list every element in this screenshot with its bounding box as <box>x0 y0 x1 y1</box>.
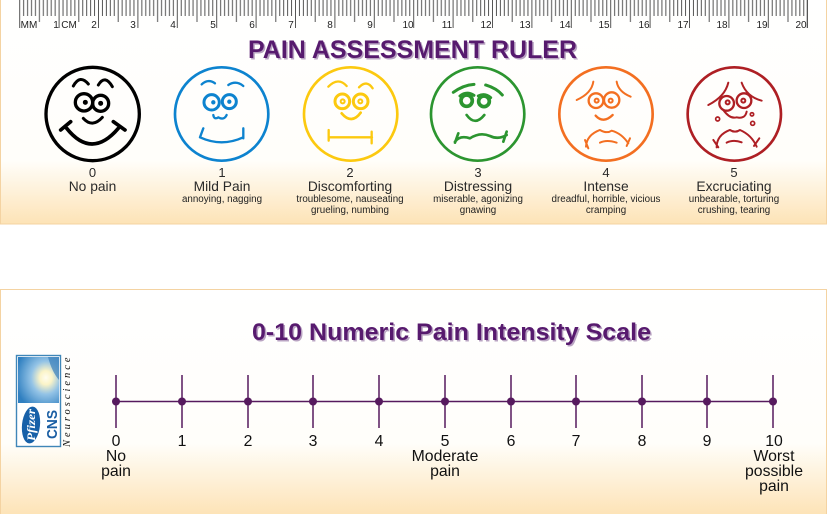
axis numbers: 2 <box>244 433 252 450</box>
ruler scale: 10 <box>402 20 414 31</box>
label: 3 distressing <box>433 165 523 216</box>
face 2: discomforting <box>304 67 397 161</box>
face 4: intense <box>559 67 653 161</box>
axis numbers: 5 <box>441 433 450 450</box>
ruler scale: 7 <box>288 20 294 31</box>
anchor label: moderate pain: Moderate <box>412 448 479 465</box>
logo: pfizer cns neuroscience <box>16 355 73 448</box>
ruler scale: 18 <box>716 20 728 31</box>
label: 4 intense: dreadful, horrible, vicious <box>552 194 661 205</box>
number line 0 to 10 <box>112 375 777 428</box>
ruler scale: 4 <box>170 20 176 31</box>
ruler scale: 8 <box>327 20 333 31</box>
label: 0 no pain <box>69 165 116 194</box>
axis numbers: 7 <box>572 433 580 450</box>
anchor label: no pain: pain <box>101 463 131 480</box>
ruler scale <box>19 0 808 31</box>
label: 0 no pain: 0 <box>89 165 96 180</box>
anchor label: worst possible pain <box>745 448 803 495</box>
label: 3 distressing: Distressing <box>444 179 512 194</box>
label: 1 mild pain: 1 <box>218 165 226 180</box>
panel: numeric pain intensity scale <box>0 290 826 514</box>
panel: pain assessment ruler <box>0 0 826 224</box>
label: 5 excruciating: unbearable, torturing <box>689 194 779 205</box>
anchor label: no pain: No <box>106 448 126 465</box>
logo: pfizer cns neuroscience: CNS <box>44 410 61 439</box>
axis numbers <box>112 433 783 450</box>
label: 1 mild pain <box>182 165 262 205</box>
label: 2 discomforting: Discomforting <box>308 179 392 194</box>
ruler scale: 12 <box>480 20 492 31</box>
ruler scale: 20 <box>795 20 807 31</box>
ruler scale: 1 <box>53 20 59 31</box>
ruler scale: 14 <box>559 20 571 31</box>
label: 2 discomforting: troublesome, nauseating <box>296 194 404 205</box>
axis numbers: 1 <box>178 433 187 450</box>
label: 5 excruciating <box>689 165 779 216</box>
axis numbers: 3 <box>309 433 318 450</box>
axis numbers: 8 <box>638 433 647 450</box>
axis numbers: 6 <box>507 433 516 450</box>
ruler scale: 11 <box>442 20 453 31</box>
anchor label: worst possible pain: possible <box>745 463 803 480</box>
ruler scale: 15 <box>598 20 610 31</box>
label: 4 intense: cramping <box>586 205 626 216</box>
ruler scale: 3 <box>130 20 136 31</box>
anchor label: moderate pain <box>412 448 479 480</box>
label: 1 mild pain: annoying, nagging <box>182 194 262 205</box>
label: 0 no pain: No pain <box>69 179 116 194</box>
ruler scale: 19 <box>756 20 768 31</box>
label: 4 intense <box>552 165 661 216</box>
axis numbers: 9 <box>703 433 712 450</box>
anchor label: worst possible pain: Worst <box>754 448 795 465</box>
ruler scale: 6 <box>249 20 255 31</box>
ruler scale: 17 <box>677 20 689 31</box>
label: 5 excruciating: crushing, tearing <box>698 205 770 216</box>
title: numeric pain intensity scale: 0-10 Numeric Pain Intensity Scale <box>252 319 651 346</box>
face 5: excruciating <box>688 67 781 161</box>
label: 5 excruciating: 5 <box>730 165 738 180</box>
face 1: mild pain <box>175 67 268 161</box>
title: pain assessment ruler: PAIN ASSESSMENT RULER <box>248 36 577 64</box>
label: 3 distressing: miserable, agonizing <box>433 194 523 205</box>
title: numeric pain intensity scale: 0-10 Numeric Pain Intensity Scale <box>254 320 652 348</box>
label: 5 excruciating: Excruciating <box>696 179 772 194</box>
label: 1 mild pain: Mild Pain <box>194 179 250 194</box>
axis numbers: 4 <box>375 433 384 450</box>
face 3: distressing <box>431 67 524 161</box>
label: 2 discomforting <box>296 165 404 216</box>
ruler scale: MM <box>21 20 37 31</box>
ruler scale: 9 <box>367 20 373 31</box>
axis numbers: 10 <box>765 433 783 450</box>
face 0: no pain <box>46 67 139 161</box>
ruler scale: CM <box>61 20 77 31</box>
title: pain assessment ruler: PAIN ASSESSMENT RULER <box>250 38 578 66</box>
anchor label: moderate pain: pain <box>430 463 460 480</box>
anchor label: worst possible pain: pain <box>759 478 789 495</box>
ruler scale: 16 <box>638 20 650 31</box>
anchor label: no pain <box>101 448 131 480</box>
label: 2 discomforting: 2 <box>346 165 354 180</box>
axis numbers: 0 <box>112 433 121 450</box>
ruler scale: 5 <box>210 20 216 31</box>
logo: pfizer cns neuroscience: Neuroscience <box>62 355 73 448</box>
ruler scale: 2 <box>91 20 97 31</box>
label: 2 discomforting: grueling, numbing <box>311 205 389 216</box>
label: 4 intense: Intense <box>583 179 629 194</box>
ruler scale: 13 <box>519 20 531 31</box>
label: 3 distressing: 3 <box>474 165 482 180</box>
label: 3 distressing: gnawing <box>460 205 496 216</box>
logo: pfizer cns neuroscience: Pfizer <box>24 409 38 441</box>
label: 4 intense: 4 <box>602 165 610 180</box>
